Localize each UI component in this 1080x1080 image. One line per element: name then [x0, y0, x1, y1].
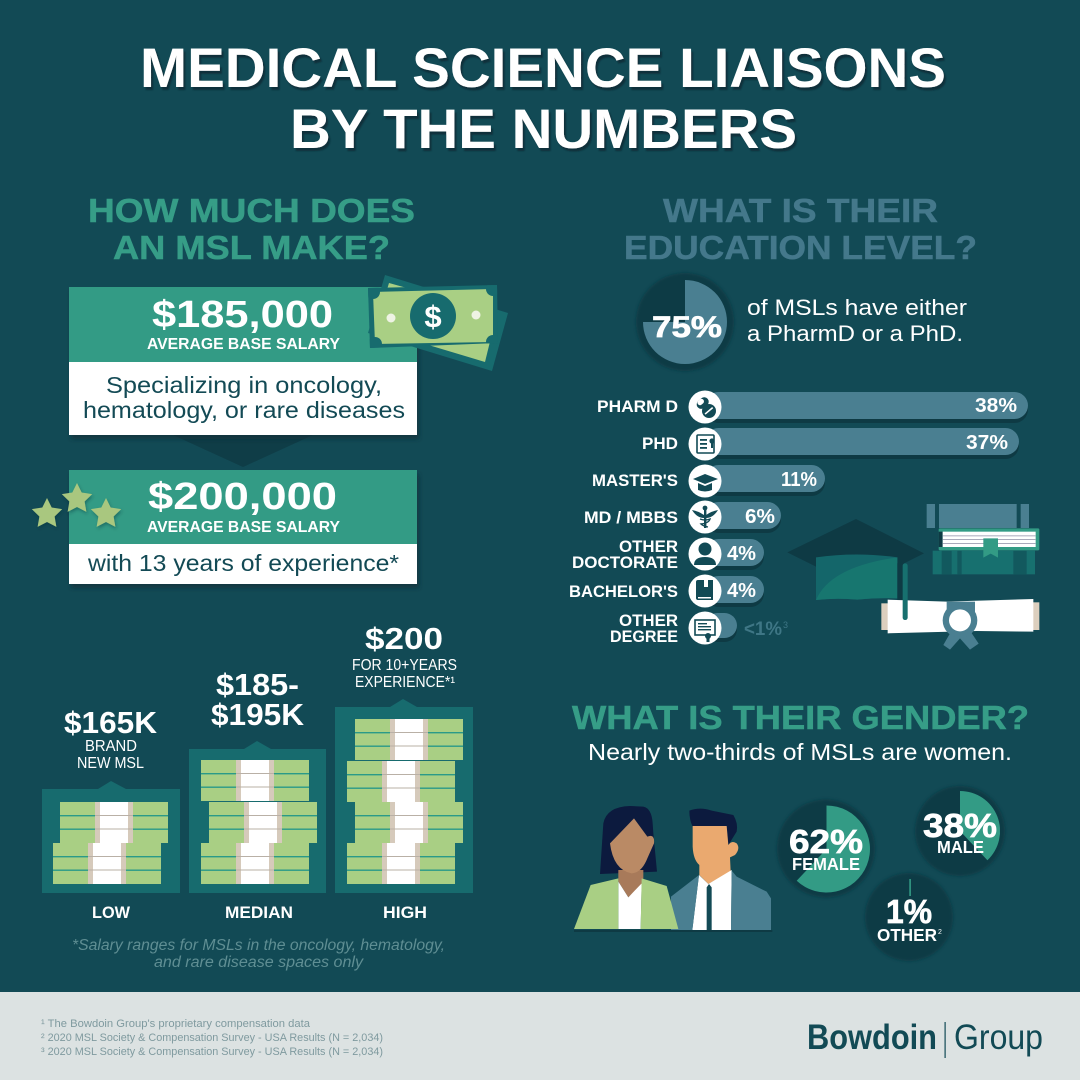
- chart: median salary stack: $195K: [211, 697, 305, 732]
- bar: other doctorate 4 percent: OTHER: [619, 538, 678, 556]
- footnotes: sources: [41, 1018, 383, 1058]
- heading: education level: [624, 192, 977, 266]
- illustration: diploma: [881, 563, 1039, 650]
- chart: low salary stack: [42, 705, 180, 922]
- bar: PhD 37 percent: PHD: [642, 435, 678, 453]
- footer band: [0, 992, 1080, 1080]
- icon: dollar bills: $: [424, 299, 442, 334]
- card: 185,000 salary: hematology, or rare diseases: [83, 397, 405, 423]
- bar: MD / MBBS 6 percent: MD / MBBS: [584, 509, 678, 527]
- bar: Master's 11 percent: [592, 464, 825, 498]
- pie: 38 percent male: [915, 786, 1005, 876]
- logo: Bowdoin Group: Bowdoin: [807, 1018, 937, 1057]
- bar: Pharm D 38 percent: [597, 390, 1028, 424]
- footnotes: sources: ¹ The Bowdoin Group's proprietary compensation data: [41, 1018, 311, 1030]
- bar: other degree under 1 percent: [610, 612, 788, 646]
- pie: 1 percent other: OTHER: [877, 925, 937, 945]
- illustration: man: [671, 809, 771, 930]
- pie: 1 percent other: [865, 873, 953, 961]
- bar: MD / MBBS 6 percent: 6%: [745, 505, 775, 528]
- bar: MD / MBBS 6 percent: [584, 500, 781, 534]
- heading: gender: WHAT IS THEIR GENDER?: [572, 699, 1029, 736]
- card: 200,000 salary: with 13 years of experience*: [87, 550, 399, 576]
- illustration: graduation cap: [787, 519, 924, 600]
- bar: Pharm D 38 percent: 38%: [975, 394, 1017, 417]
- chart: low salary stack: NEW MSL: [77, 755, 144, 772]
- illustration: books: [927, 504, 1039, 574]
- panel: education: [569, 192, 1039, 650]
- card: 185,000 salary: [69, 287, 417, 435]
- footnotes: sources: ³ 2020 MSL Society & Compensation Survey - USA Results (N = 2,034): [41, 1046, 383, 1058]
- chart: low salary stack: $165K: [64, 705, 158, 740]
- bar: PhD 37 percent: [642, 428, 1019, 460]
- pie: 75 percent: 75%: [652, 311, 722, 344]
- bar: Pharm D 38 percent: PHARM D: [597, 398, 678, 416]
- icon: three stars: [32, 483, 121, 527]
- illustration: woman: [574, 806, 678, 929]
- pie: 38 percent male: MALE: [937, 837, 984, 857]
- bar: Bachelor's 4 percent: 4%: [727, 579, 756, 602]
- heading: how much does an MSL make: AN MSL MAKE?: [113, 229, 390, 266]
- chart: high salary stack: $200: [365, 621, 443, 656]
- pie: 75 percent: [636, 273, 734, 371]
- chart: median salary stack: $185-: [216, 667, 299, 702]
- chart: low salary stack: BRAND: [85, 738, 137, 755]
- chart: low salary stack: LOW: [92, 903, 131, 922]
- icon: dollar bills: [366, 275, 508, 371]
- footnote: salary ranges: and rare disease spaces only: [154, 954, 364, 971]
- heading: education level: WHAT IS THEIR: [663, 192, 938, 229]
- card: 200,000 salary: [69, 470, 417, 584]
- pie: 62 percent female: FEMALE: [792, 854, 860, 874]
- card: 185,000 salary: $185,000: [152, 294, 333, 336]
- bar: other degree under 1 percent: DEGREE: [610, 628, 678, 646]
- bar: other degree under 1 percent: OTHER: [619, 612, 678, 630]
- pie: 62 percent female: 62%: [789, 823, 863, 860]
- heading: education level: EDUCATION LEVEL?: [624, 229, 977, 266]
- footnote: salary ranges: [72, 937, 445, 971]
- text: share with PharmD or PhD: a PharmD or a PhD.: [747, 321, 963, 346]
- chart: high salary stack: EXPERIENCE*¹: [355, 674, 455, 691]
- panel: gender: [572, 699, 1029, 961]
- chart: median salary stack: [189, 667, 326, 922]
- footnotes: sources: ² 2020 MSL Society & Compensation Survey - USA Results (N = 2,034): [41, 1032, 383, 1044]
- illustration: cap, books and diploma: [787, 504, 1039, 650]
- text: share with PharmD or PhD: of MSLs have either: [747, 295, 968, 320]
- text: share with PharmD or PhD: [747, 295, 968, 346]
- bar: other doctorate 4 percent: 4%: [727, 542, 756, 565]
- bar: Bachelor's 4 percent: BACHELOR'S: [569, 583, 678, 601]
- pie: 1 percent other: 2: [938, 929, 942, 936]
- card: 200,000 salary: $200,000: [148, 476, 337, 518]
- chart: high salary stack: HIGH: [383, 903, 427, 922]
- heading: how much does an MSL make: [88, 192, 415, 266]
- bar: other doctorate 4 percent: [572, 538, 764, 572]
- card: 185,000 salary: AVERAGE BASE SALARY: [147, 336, 340, 353]
- footnote: salary ranges: *Salary ranges for MSLs in the oncology, hematology,: [72, 937, 445, 954]
- panel: salary: [32, 192, 508, 971]
- pie: 1 percent other: 1%: [886, 893, 932, 930]
- chart: education bars: [569, 390, 1028, 646]
- pie: 38 percent male: 38%: [923, 807, 997, 844]
- bar: PhD 37 percent: 37%: [966, 431, 1008, 454]
- chart: median salary stack: MEDIAN: [225, 903, 293, 922]
- title: MEDICAL SCIENCE LIAISONS: [140, 36, 946, 99]
- illustration: man and woman: [574, 806, 772, 932]
- title: [140, 36, 946, 160]
- arrow between salary cards: [173, 435, 313, 467]
- heading: how much does an MSL make: HOW MUCH DOES: [88, 192, 415, 229]
- subheading: two-thirds women: Nearly two-thirds of MSLs are women.: [588, 739, 1012, 765]
- bar: Bachelor's 4 percent: [569, 574, 764, 608]
- bar: Master's 11 percent: MASTER'S: [592, 472, 678, 490]
- bar: Master's 11 percent: 11%: [781, 468, 817, 491]
- bar: other degree under 1 percent: <1%: [744, 619, 782, 640]
- logo: Bowdoin Group: [807, 1018, 1043, 1058]
- bar: other degree under 1 percent: 3: [783, 620, 788, 630]
- chart: high salary stack: [335, 621, 473, 922]
- logo: Bowdoin Group: Group: [954, 1018, 1043, 1057]
- card: 185,000 salary: Specializing in oncology,: [106, 372, 382, 398]
- bar: other doctorate 4 percent: DOCTORATE: [572, 554, 678, 572]
- pie: 62 percent female: [777, 800, 875, 898]
- chart: high salary stack: FOR 10+YEARS: [352, 657, 457, 674]
- card: 200,000 salary: AVERAGE BASE SALARY: [147, 519, 340, 536]
- title: BY THE NUMBERS: [290, 97, 797, 160]
